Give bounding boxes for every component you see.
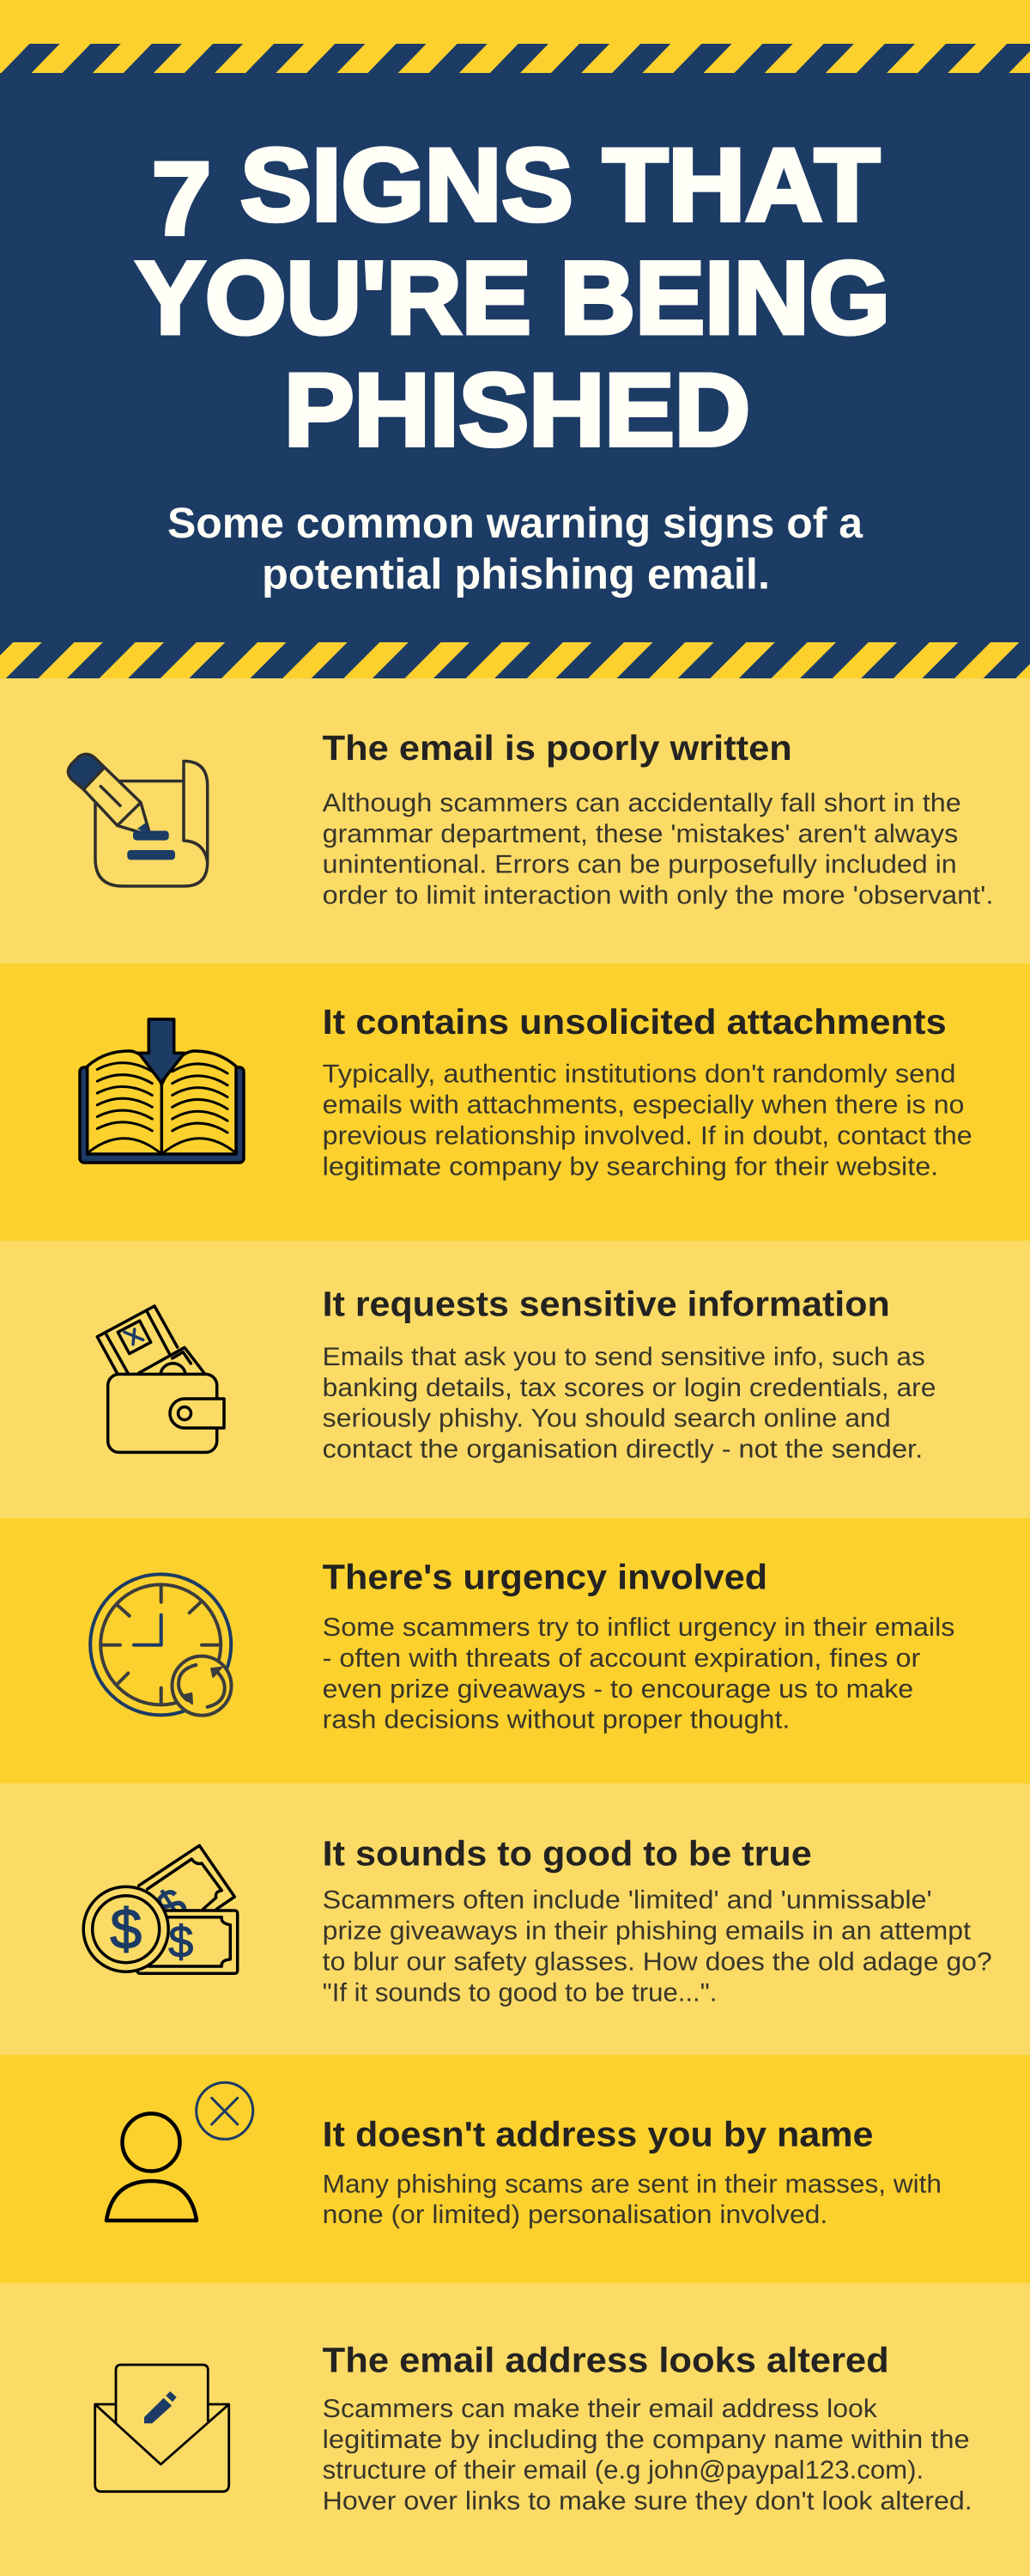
title: SIGNS THAT (240, 127, 880, 242)
icon: envelope with letter and pencil (95, 2365, 229, 2492)
heading: There's urgency involved (323, 1558, 767, 1597)
heading: The email address looks altered (323, 2341, 889, 2380)
body text: "If it sounds to good to be true...". (323, 1979, 717, 2008)
body text: Many phishing scams are sent in their masses, with (323, 2170, 942, 2198)
body text (323, 1060, 972, 1181)
body text: seriously phishy. You should search online and (323, 1405, 891, 1433)
body text: Some scammers try to inflict urgency in their emails (323, 1613, 954, 1642)
body text (323, 2395, 972, 2516)
body text (323, 1886, 992, 2008)
heading: The email is poorly written (323, 728, 792, 768)
subtitle: Some common warning signs of a (167, 499, 863, 547)
body text: contact the organisation directly - not the sender. (323, 1436, 923, 1464)
panel: too good to be true (0, 1783, 1030, 2055)
body text: Hover over links to make sure they don't look altered. (323, 2488, 972, 2516)
heading: It requests sensitive information (323, 1285, 890, 1324)
body text (323, 2170, 942, 2229)
body text: order to limit interaction with only the more 'observant'. (323, 881, 993, 909)
body text: emails with attachments, especially when there is no (323, 1091, 964, 1120)
body text (323, 1613, 954, 1735)
body text (323, 1343, 936, 1464)
body text: Emails that ask you to send sensitive info, such as (323, 1343, 925, 1371)
body text: to blur our safety glasses. How does the old adage go? (323, 1948, 992, 1977)
header panel (0, 0, 1030, 678)
body text: grammar department, these 'mistakes' aren't always (323, 820, 958, 848)
panel: urgency (0, 1518, 1030, 1783)
icon: coin and banknotes: $ (148, 1879, 196, 1934)
title (136, 127, 890, 467)
icon: pencil and scroll (69, 754, 208, 886)
body text (323, 789, 993, 909)
icon: clock with refresh (90, 1574, 232, 1716)
icon: coin and banknotes: $ (110, 1897, 142, 1960)
panel: poorly written (0, 678, 1030, 963)
body text: even prize giveaways - to encourage us to make (323, 1675, 913, 1704)
heading: It contains unsolicited attachments (323, 1002, 947, 1042)
panel: sensitive information (0, 1241, 1030, 1518)
subtitle: potential phishing email. (262, 550, 770, 598)
icon: book with download arrow (80, 1019, 244, 1163)
body text: Typically, authentic institutions don't randomly send (323, 1060, 956, 1089)
icon: wallet with ticket and banknote (97, 1306, 224, 1452)
icon: person with cross badge (106, 2082, 253, 2221)
body text: previous relationship involved. If in doubt, contact the (323, 1122, 972, 1151)
icon: coin and banknotes (83, 1845, 238, 1973)
body text: legitimate by including the company name within the (323, 2426, 970, 2454)
heading: It doesn't address you by name (323, 2114, 874, 2154)
panel: unsolicited attachments (0, 963, 1030, 1241)
body text: Scammers often include 'limited' and 'unmissable' (323, 1886, 932, 1915)
body text: banking details, tax scores or login credentials, are (323, 1374, 936, 1402)
title: YOU'RE BEING (136, 240, 890, 355)
body text: unintentional. Errors can be purposefully included in (323, 851, 957, 879)
icon: coin and banknotes: $ (168, 1917, 193, 1967)
body text: none (or limited) personalisation involved. (323, 2201, 827, 2229)
title: PHISHED (284, 352, 750, 467)
body text: legitimate company by searching for their website. (323, 1152, 938, 1181)
body text: prize giveaways in their phishing emails in an attempt (323, 1917, 972, 1946)
panel: altered email address (0, 2283, 1030, 2576)
heading: It sounds to good to be true (323, 1834, 812, 1874)
subtitle (167, 499, 863, 598)
body text: structure of their email (e.g john@paypal123.com). (323, 2457, 924, 2485)
body text: - often with threats of account expiration, fines or (323, 1644, 920, 1673)
title: 7 (152, 141, 211, 256)
body text: rash decisions without proper thought. (323, 1706, 790, 1735)
body text: Scammers can make their email address look (323, 2395, 878, 2423)
panel: address by name (0, 2055, 1030, 2283)
body text: Although scammers can accidentally fall short in the (323, 789, 961, 817)
